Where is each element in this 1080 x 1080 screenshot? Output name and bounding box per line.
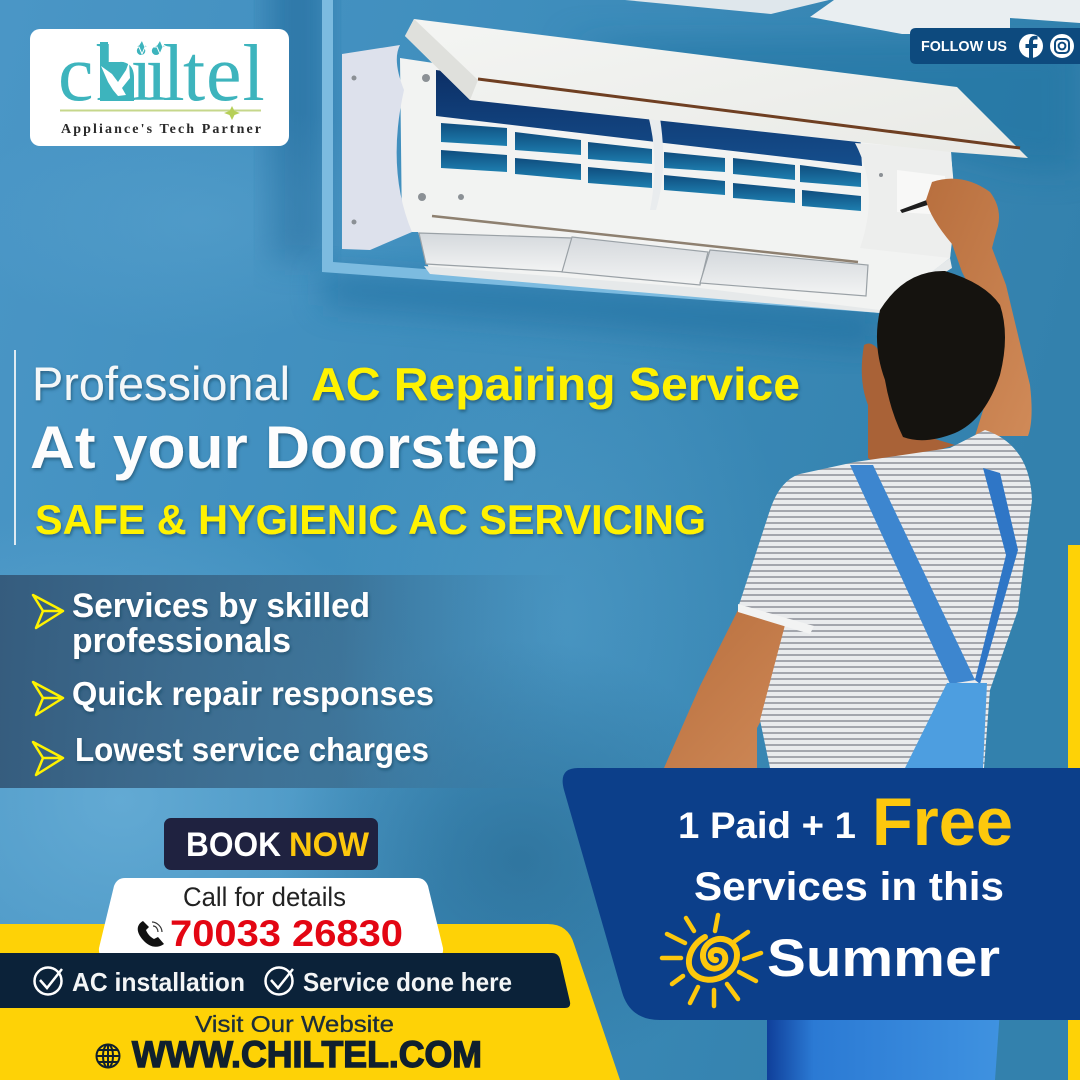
- website url: WWW.CHILTEL.COM: [132, 1034, 482, 1075]
- follow us label: FOLLOW US: [921, 38, 1007, 55]
- follow us bar: [910, 28, 1080, 64]
- lower cabinet edge: [424, 258, 952, 313]
- benefit 3: Lowest service charges: [75, 731, 429, 768]
- right yellow strip: [1068, 545, 1080, 1080]
- underline with star: [60, 106, 261, 120]
- service label 1: AC installation: [72, 967, 245, 997]
- icon: arrow 1: [33, 595, 63, 628]
- screw details: [352, 74, 883, 224]
- headline block: [14, 350, 800, 545]
- bar: [910, 28, 1080, 64]
- headline rule: [14, 350, 16, 545]
- icon: check 1: [34, 968, 62, 994]
- card: [30, 29, 289, 146]
- icon: check 2: [266, 968, 293, 994]
- bottom louvres: [419, 233, 868, 296]
- cover brown stripe: [478, 79, 1020, 148]
- hinged front cover: [405, 19, 1028, 158]
- offer highlight: Free: [872, 784, 1013, 860]
- icon: phone: [138, 921, 164, 947]
- headline line 2: At your Doorstep: [30, 414, 538, 481]
- eagle mark: [101, 62, 130, 96]
- benefit 1: Services by skilled: [72, 587, 370, 625]
- website label: Visit Our Website: [195, 1011, 394, 1037]
- ceiling fixtures top right: [625, 0, 1080, 34]
- dark services strip: [0, 953, 570, 1008]
- icon: globe: [96, 1044, 120, 1068]
- technician: [664, 179, 1032, 1080]
- brand name: chiiltel: [58, 30, 265, 118]
- icon: instagram: [1050, 34, 1074, 58]
- logo sparkles: [135, 40, 167, 54]
- left end cap: [342, 45, 412, 250]
- benefit 1: professionals: [72, 622, 291, 660]
- dark blue inner filter band: [436, 70, 862, 166]
- panel: contact footer: [0, 818, 620, 1080]
- cover side panel: [405, 19, 478, 100]
- brown trim line: [432, 216, 858, 262]
- grille vents: [441, 123, 861, 211]
- call label: Call for details: [183, 882, 346, 912]
- icon: facebook: [1019, 34, 1043, 58]
- striped t-shirt: [738, 430, 1032, 768]
- overall bib: [905, 683, 987, 768]
- air conditioner unit with technician's repair: [322, 0, 1028, 313]
- headline line 3: SAFE & HYGIENIC AC SERVICING: [35, 496, 706, 543]
- book now button: [164, 818, 378, 870]
- headline highlight: AC Repairing Service: [311, 358, 800, 410]
- right side housing: [855, 143, 954, 258]
- benefits band: [0, 575, 570, 788]
- screwdriver: [900, 198, 934, 213]
- offer line 3: Summer: [767, 929, 1000, 988]
- offer line 2: Services in this: [694, 865, 1004, 909]
- trousers: [767, 1010, 1000, 1080]
- offer line 1: 1 Paid + 1: [678, 805, 856, 846]
- icon: arrow 3: [33, 742, 63, 775]
- sleeve cuff: [738, 604, 814, 634]
- headline line 1: Professional: [32, 357, 290, 410]
- overall strap left: [850, 465, 975, 684]
- raised arm and hand: [926, 179, 1032, 436]
- h block: [100, 42, 134, 101]
- neck and ear: [862, 344, 955, 468]
- panel: benefits list: [0, 575, 570, 788]
- left arm: [664, 610, 810, 768]
- tagline: Appliance's Tech Partner: [61, 122, 261, 137]
- service label 2: Service done here: [303, 967, 512, 997]
- overall strap right: [975, 468, 1018, 684]
- icon: arrow 2: [33, 682, 63, 715]
- divider post: [648, 115, 663, 210]
- hair: [877, 271, 1005, 440]
- phone number: 70033 26830: [170, 913, 403, 954]
- yellow footer shape: [0, 924, 620, 1080]
- book now button: NOW: [289, 826, 370, 864]
- AC main body: [400, 58, 953, 312]
- logo card: [30, 29, 289, 146]
- icon: sun: [662, 915, 761, 1006]
- panel: offer: [563, 768, 1080, 1020]
- benefit 2: Quick repair responses: [72, 675, 434, 712]
- offer background: [563, 768, 1080, 1020]
- wall mounting plate: [322, 0, 880, 313]
- call card: [99, 878, 443, 958]
- right side access panel: [897, 170, 945, 215]
- book now button: BOOK: [186, 826, 281, 864]
